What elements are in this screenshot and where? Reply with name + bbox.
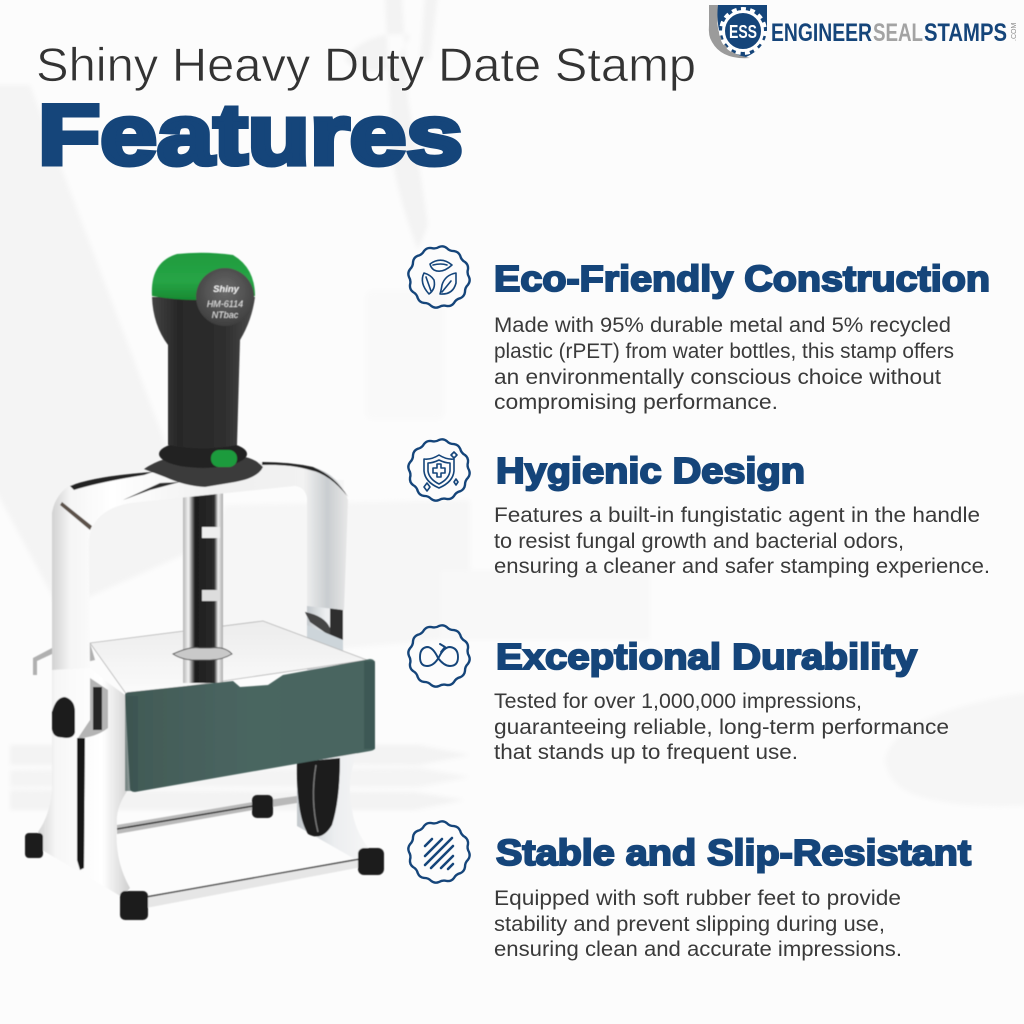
body text: to resist fungal growth and bacterial odors,: [494, 530, 904, 553]
right leg: [297, 752, 372, 862]
body text: that stands up to frequent use.: [494, 741, 798, 764]
icon: diagonal grip lines: [408, 821, 470, 883]
handle: HM-6114: [207, 299, 243, 309]
body text: compromising performance.: [494, 391, 778, 414]
handle: [144, 253, 263, 487]
logo: Engineer Seal Stamps: SEAL: [873, 19, 923, 47]
rubber feet: [25, 833, 384, 920]
logo: Engineer Seal Stamps: [709, 5, 1018, 58]
icon: shield with cross: [408, 439, 470, 501]
cable strap: [297, 758, 340, 837]
right arm lower: [305, 480, 344, 670]
medallion: [196, 268, 254, 326]
left latch and slot: [52, 678, 108, 870]
logo: Engineer Seal Stamps: ENGINEER: [771, 19, 872, 47]
body text: Equipped with soft rubber feet to provide: [494, 887, 901, 910]
back left bracket: [33, 643, 95, 675]
top plate: [90, 621, 367, 695]
heading: Stable and Slip-Resistant: [496, 832, 971, 873]
logo: Engineer Seal Stamps: STAMPS: [924, 19, 1007, 47]
handle: Shiny: [213, 284, 240, 295]
green cap: [152, 253, 255, 300]
feature: slip-resistant: [408, 821, 971, 961]
chrome arch frame: [52, 462, 348, 670]
handle: NTbac: [212, 310, 239, 320]
body text: stability and prevent slipping during use,: [494, 913, 885, 936]
heading: Features: Features: [38, 88, 463, 183]
green button: [211, 450, 237, 467]
heading: Exceptional Durability: [496, 636, 917, 677]
collar: [159, 440, 247, 468]
left side plate: [38, 668, 130, 897]
feature: durability: [408, 625, 949, 764]
body text: [494, 504, 990, 578]
body text: plastic (rPET) from water bottles, this stamp offers: [494, 340, 954, 363]
stamp product: [25, 253, 384, 920]
icon: recycled leaves: [408, 246, 470, 308]
body text: guaranteeing reliable, long-term performance: [494, 716, 949, 739]
body text: an environmentally conscious choice without: [494, 366, 941, 389]
body text: [494, 314, 954, 414]
body text: Made with 95% durable metal and 5% recycled: [494, 314, 951, 337]
flange: [144, 456, 263, 487]
body text: Features a built-in fungistatic agent in the handle: [494, 504, 980, 527]
feature: hygienic: [408, 439, 990, 578]
title: Shiny Heavy Duty Date Stamp: [36, 39, 696, 92]
frame reflections: [60, 462, 348, 530]
heading: Hygienic Design: [496, 450, 805, 491]
front rod: [146, 858, 362, 908]
body text: ensuring clean and accurate impressions.: [494, 938, 902, 961]
body text: [494, 690, 949, 764]
body text: [494, 887, 902, 961]
centre column: [173, 487, 232, 683]
heading: Eco-Friendly Construction: [494, 258, 990, 299]
grip: [152, 297, 255, 448]
logo: Engineer Seal Stamps: ESS: [729, 21, 757, 42]
logo: Engineer Seal Stamps: .COM: [1011, 23, 1018, 41]
icon: infinity loop arrow: [408, 625, 470, 687]
green window: [125, 659, 375, 792]
body text: ensuring a cleaner and safer stamping experience.: [494, 555, 990, 578]
feature: eco-friendly: [408, 246, 990, 414]
back rod: [117, 795, 297, 834]
body text: Tested for over 1,000,000 impressions,: [494, 690, 862, 713]
